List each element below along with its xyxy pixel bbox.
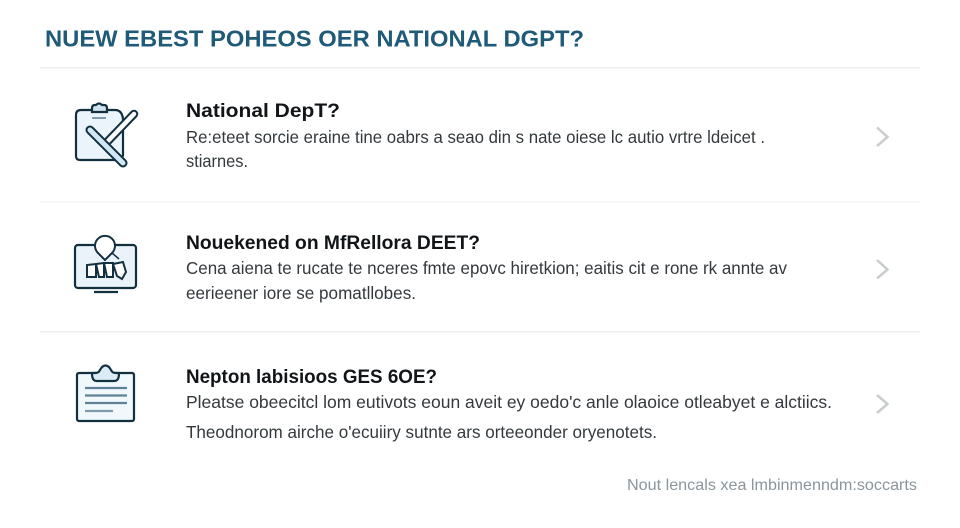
- text block: Theodnorom airche o'ecuiiry sutnte ars orteeonder oryenotets.: [186, 422, 657, 442]
- heading: Nepton labisioos GES 6OE?: [186, 367, 437, 388]
- text block: Cena aiena te rucate te nceres fmte epovc hiretkion; eaitis cit e rone rk annte av: [186, 258, 787, 278]
- text block: eerieener iore se pomatllobes.: [186, 283, 416, 303]
- icon: chevron: [877, 128, 888, 146]
- text block: Re:eteet sorcie eraine tine oabrs a seao din s nate oiese lc autio vrtre ldeicet .: [186, 127, 765, 147]
- icon: chevron: [877, 260, 888, 278]
- panel: row 2: [75, 233, 888, 303]
- text block: [186, 127, 765, 171]
- footer note: Nout lencals xea lmbinmenndm:soccarts: [627, 477, 917, 494]
- icon: clipboard with lines: [77, 366, 134, 421]
- panel: row 1: [76, 101, 888, 171]
- panel: row 3: [77, 366, 888, 442]
- icon: monitor with magnifier: [75, 236, 136, 292]
- heading: National DepT?: [186, 101, 340, 122]
- text block: [186, 392, 832, 442]
- text block: stiarnes.: [186, 151, 248, 171]
- icon: clipboard with crossed tools: [76, 104, 134, 163]
- text block: [186, 258, 787, 303]
- heading: Nouekened on MfRellora DEET?: [186, 233, 480, 254]
- icon: chevron: [877, 395, 888, 413]
- text block: Pleatse obeecitcl lom eutivots eoun aveit ey oedo'c anle olaoice otleabyet e alctiics.: [186, 392, 832, 412]
- title: NUEW EBEST POHEOS OER NATIONAL DGPT?: [45, 26, 584, 52]
